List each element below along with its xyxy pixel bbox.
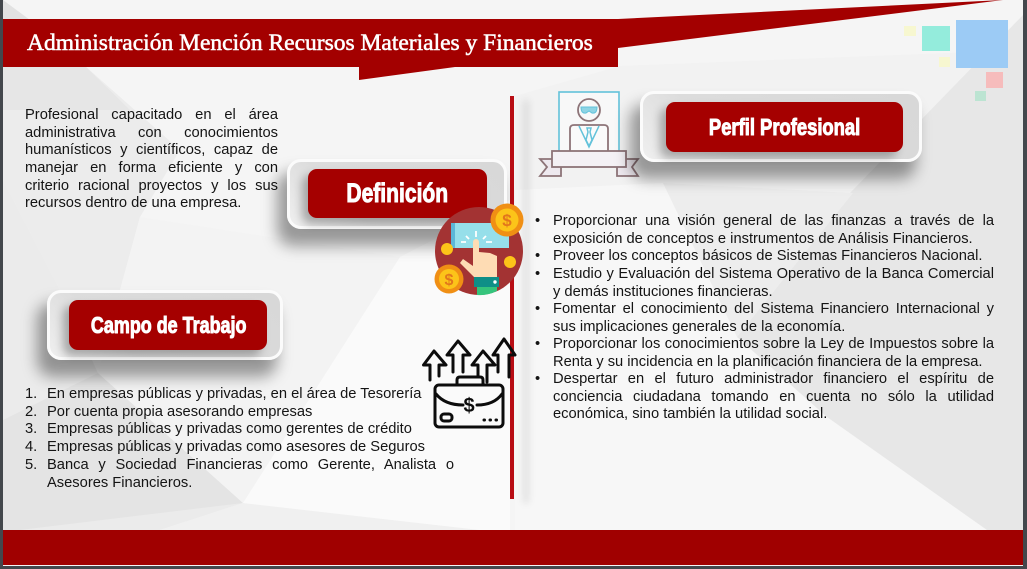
item 3: Empresas públicas y privadas como gerentes de crédito — [47, 421, 412, 437]
item 1: En empresas públicas y privadas, en el área de Tesorería — [47, 386, 421, 402]
definition text: recursos dentro de una empresa. — [25, 195, 241, 211]
bullet 4: sus implicaciones generales de la economía. — [553, 318, 845, 334]
title: Administración Mención Recursos Materiales y Financieros — [27, 30, 593, 56]
bullet 6: • — [535, 371, 540, 387]
title banner — [3, 0, 1003, 80]
bullet 3: y demás instituciones financieras. — [553, 284, 773, 300]
footer band — [3, 530, 1023, 565]
bullet 1: exposición de conceptos e instrumentos de Análisis Financieros. — [553, 230, 973, 246]
bullet 5: Renta y su incidencia en la planificación financiera de la empresa. — [553, 354, 982, 370]
bullet 3: Estudio y Evaluación del Sistema Operativo de la Banca Comercial — [553, 266, 994, 282]
bullet 2: • — [535, 248, 540, 264]
list: perfil profesional — [535, 213, 994, 422]
bullet 1 — [535, 213, 994, 246]
decorative squares — [904, 20, 1008, 101]
definition text — [25, 107, 278, 211]
definition text: administrativa con conocimientos — [25, 125, 278, 141]
definition text: Profesional capacitado en el área — [25, 107, 278, 123]
item 4: Empresas públicas y privadas como asesores de Seguros — [47, 439, 425, 455]
icon: coin: $ — [445, 272, 454, 289]
item 3: 3. — [25, 421, 37, 437]
item 2: Por cuenta propia asesorando empresas — [47, 404, 312, 420]
list: campo de trabajo — [25, 386, 454, 490]
definition text: humanísticos y científicos, capaz de — [25, 142, 278, 158]
heading: Perfil Profesional: Perfil Profesional — [709, 114, 860, 140]
bullet 1: • — [535, 213, 540, 229]
icon: briefcase with rising arrows: $ — [463, 395, 475, 417]
definition text: manejar en forma eficiente y con — [25, 160, 278, 176]
heading: Campo de Trabajo — [27, 290, 287, 387]
bullet 4: • — [535, 301, 540, 317]
item 1: 1. — [25, 386, 37, 402]
item 5: 5. — [25, 457, 37, 473]
item 5: Asesores Financieros. — [47, 474, 192, 490]
bullet 2: Proveer los conceptos básicos de Sistemas Financieros Nacional. — [553, 248, 982, 264]
item 5 — [25, 457, 454, 490]
heading: Definición: Definición — [347, 178, 448, 208]
bullet 6: Despertar en el futuro administrador financiero el espíritu de — [553, 371, 994, 387]
bullet 4: Fomentar el conocimiento del Sistema Financiero Internacional y — [553, 301, 994, 317]
bullet 5: • — [535, 336, 540, 352]
bullet 3 — [535, 266, 994, 300]
bullet 1: Proporcionar una visión general de las finanzas a través de la — [553, 213, 994, 229]
item 5: Banca y Sociedad Financieras como Gerente, Analista o — [47, 457, 454, 473]
heading: Definición — [267, 162, 510, 256]
icon: hand tapping card with coins — [434, 204, 524, 296]
heading: Perfil Profesional — [620, 91, 926, 189]
item 2: 2. — [25, 404, 37, 420]
bullet 5: Proporcionar los conocimientos sobre la Ley de Impuestos sobre la — [553, 336, 994, 352]
bullet 6: conciencia ciudadana tomando en cuenta no sólo la utilidad — [553, 388, 994, 404]
bullet 6: económica, sino también la utilidad social. — [553, 406, 827, 422]
icon: professional at podium — [538, 91, 640, 177]
bullet 3: • — [535, 266, 540, 282]
bullet 5 — [535, 336, 994, 370]
bullet 6 — [535, 371, 994, 422]
central divider — [510, 96, 514, 499]
icon: briefcase with rising arrows — [422, 337, 517, 428]
definition text: criterio racional proyectos y los sus — [25, 178, 278, 194]
item 4: 4. — [25, 439, 37, 455]
bullet 4 — [535, 301, 994, 334]
heading: Campo de Trabajo: Campo de Trabajo — [91, 312, 246, 338]
icon: coin: $ — [502, 211, 512, 230]
